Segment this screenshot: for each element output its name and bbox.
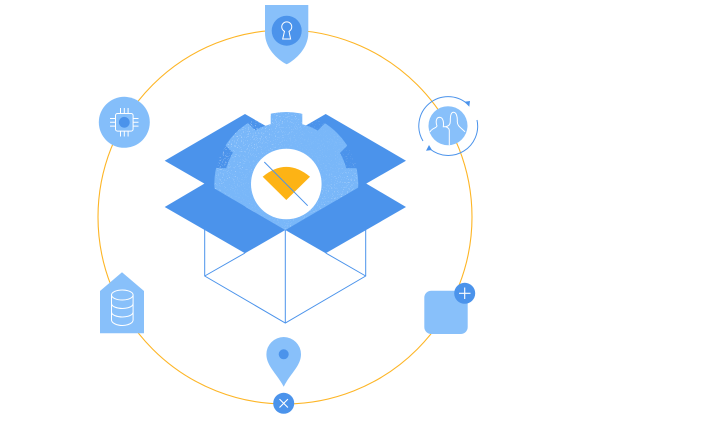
icon: users with sync arrows — [419, 97, 478, 155]
slash line — [264, 162, 308, 206]
icon: map pin — [266, 337, 301, 387]
gear — [214, 112, 358, 230]
orange orbit ring — [98, 30, 472, 404]
box outline — [205, 225, 366, 323]
gear speckle — [214, 112, 358, 230]
open box — [165, 105, 406, 323]
front flaps — [165, 183, 406, 253]
icon: shield with keyhole — [265, 5, 308, 64]
icon: database house — [100, 272, 144, 333]
icon: close button — [273, 393, 294, 414]
icon: chip — [99, 97, 150, 148]
center white circle — [251, 149, 322, 219]
back flaps — [165, 114, 406, 207]
icon: wifi wedge — [263, 167, 310, 200]
icon: plus square — [424, 283, 475, 334]
